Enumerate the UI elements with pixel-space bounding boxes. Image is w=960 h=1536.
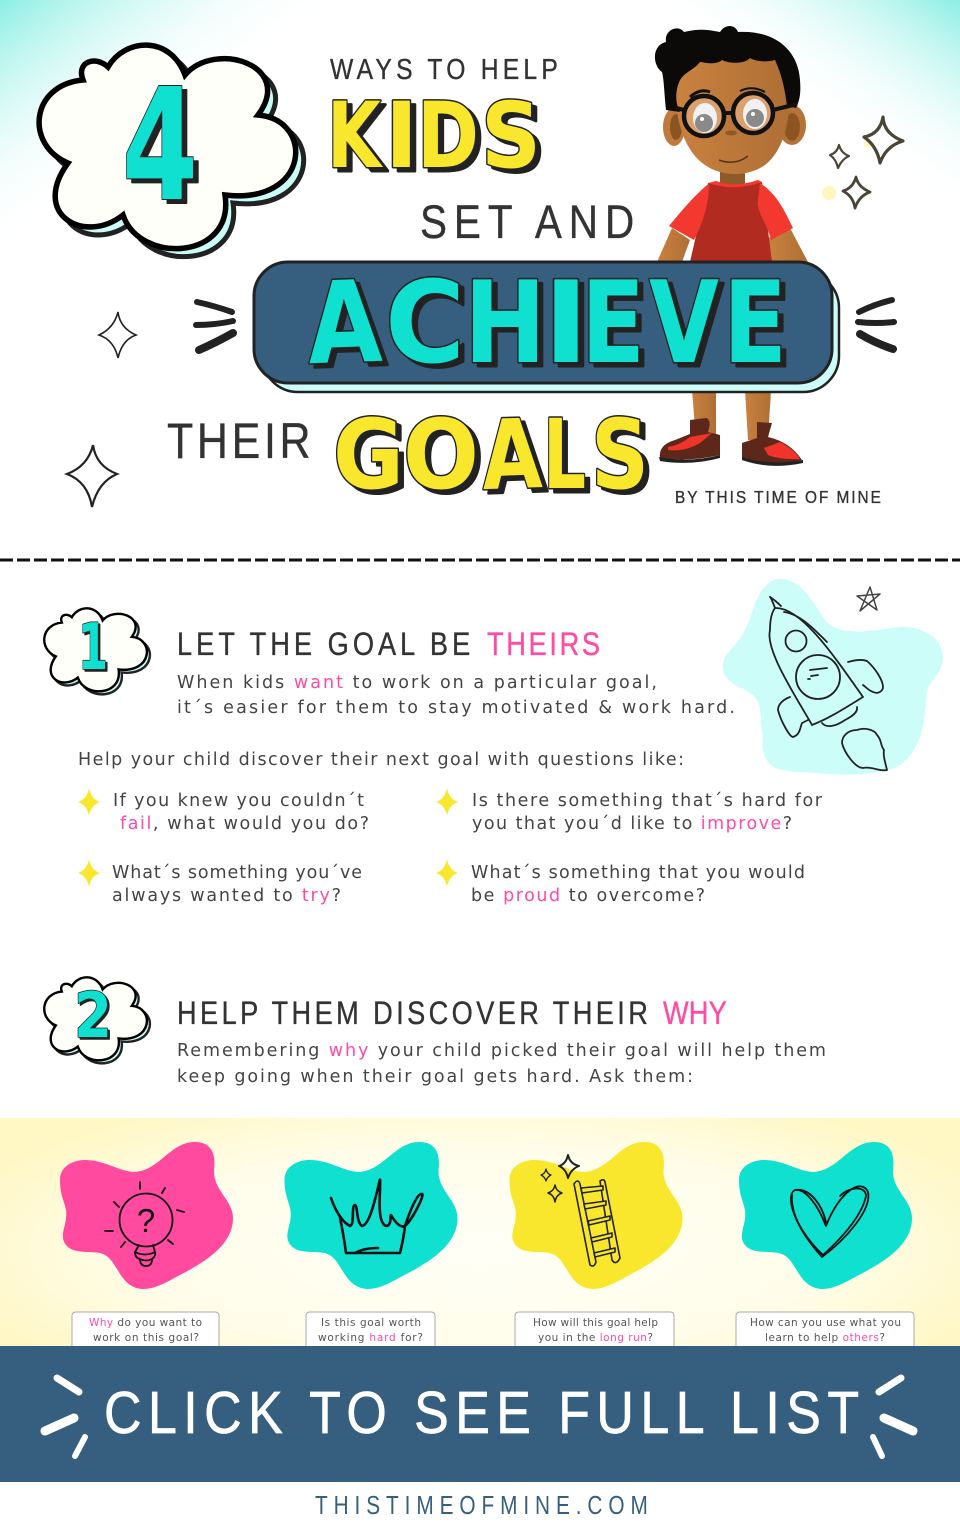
decorative sparkles near boy <box>822 117 903 208</box>
title word: GOALS: O <box>403 399 479 511</box>
title word: GOALS: S <box>591 399 649 511</box>
title line: their: THEIR <box>167 413 311 469</box>
achieve banner: C <box>385 257 465 389</box>
burst marks right of banner <box>858 300 894 349</box>
title word: GOALS: L <box>543 399 586 511</box>
card: long run (ladder) <box>510 1142 682 1289</box>
caption: others: learn to help others? <box>765 1332 885 1344</box>
card: worth it (crown) <box>284 1142 458 1289</box>
icon: cloud number 2 <box>44 977 150 1063</box>
caption: others <box>736 1312 914 1346</box>
card: others (heart) <box>739 1142 912 1289</box>
title word: KIDS <box>327 84 541 189</box>
achieve banner: E <box>581 257 645 389</box>
card: why (lightbulb): ? <box>137 1202 155 1239</box>
bullet: if you knew: If you knew you couldn´t <box>113 791 364 811</box>
prompt line: Help your child discover their next goal with questions like: <box>78 750 684 770</box>
bullet: always wanted: What´s something you´ve <box>112 863 362 883</box>
section 2 heading: HELP THEM DISCOVER THEIR <box>177 996 648 1032</box>
bullet: proud to overcome: What´s something that you would <box>471 863 805 883</box>
bullet: something hard: Is there something that´s hard for <box>472 791 823 811</box>
title word: KIDS: S <box>481 84 541 189</box>
icon: cloud with number 4 <box>39 45 304 257</box>
title word: GOALS <box>333 398 649 512</box>
section 2 intro text: keep going when their goal gets hard. Ask them: <box>177 1067 693 1087</box>
section 1 heading: THEIRS <box>487 627 600 663</box>
call to action banner <box>0 1346 960 1482</box>
achieve banner: I <box>543 257 589 389</box>
caption: long run <box>515 1312 674 1346</box>
bullet: proud to overcome <box>436 859 805 906</box>
icon: cloud number 1 <box>44 608 150 694</box>
section 1 intro text: it´s easier for them to stay motivated & work hard. <box>177 698 735 718</box>
bullet: always wanted: always wanted to try? <box>112 886 341 906</box>
dashed divider <box>0 558 960 562</box>
title line: ways to help: WAYS TO HELP <box>330 53 558 85</box>
caption: why: Why do you want to <box>89 1317 202 1329</box>
burst marks left of banner <box>196 302 233 350</box>
achieve banner: H <box>464 257 546 389</box>
section 1 heading <box>177 627 600 663</box>
title word: KIDS: I <box>385 84 418 189</box>
background: top corner gradients <box>0 0 960 560</box>
call to action banner: CLICK TO SEE FULL LIST <box>104 1380 859 1446</box>
title word: GOALS: A <box>480 398 544 512</box>
title word: GOALS: G <box>333 399 404 511</box>
section 2 intro text: Remembering why your child picked their goal will help them <box>177 1041 826 1061</box>
sparkle left lower <box>67 445 117 507</box>
achieve banner: V <box>649 257 719 389</box>
title word: KIDS: D <box>417 84 479 189</box>
achieve banner: A <box>305 256 384 390</box>
caption: why: work on this goal? <box>93 1332 199 1344</box>
title word: KIDS: K <box>327 84 384 189</box>
illustration: boy with glasses <box>655 26 808 466</box>
footer url: THISTIMEOFMINE.COM <box>315 1491 648 1520</box>
caption: worth it <box>306 1312 435 1346</box>
section 1 intro text: When kids want to work on a particular goal, <box>177 673 657 693</box>
achieve banner <box>254 256 839 392</box>
icon: cloud with number 4: 4 <box>122 55 198 236</box>
card: why (lightbulb) <box>60 1142 233 1289</box>
bullet: always wanted <box>78 859 362 906</box>
pale yellow band <box>0 1118 960 1348</box>
icon: cloud number 1: 1 <box>78 611 108 685</box>
icon: cloud number 2: 2 <box>74 979 112 1052</box>
section 1 intro text <box>177 673 735 718</box>
caption: long run: you in the long run? <box>538 1332 653 1344</box>
section 2 heading: WHY <box>663 996 727 1032</box>
caption: others: How can you use what you <box>750 1317 901 1329</box>
achieve banner: E <box>723 257 787 389</box>
caption: worth it: Is this goal worth <box>321 1317 421 1329</box>
section 1 heading: LET THE GOAL BE <box>177 627 470 663</box>
caption: long run: How will this goal help <box>533 1317 658 1329</box>
bullet: if you knew: fail, what would you do? <box>120 814 369 834</box>
title line: set and: SET AND <box>420 196 634 249</box>
caption: why <box>72 1312 219 1346</box>
illustration: rocket on teal blob <box>723 579 943 775</box>
section 2 intro text <box>177 1041 826 1087</box>
bullet: something hard: you that you´d like to improve? <box>472 814 792 834</box>
bullet: proud to overcome: be proud to overcome? <box>471 886 705 906</box>
caption: worth it: working hard for? <box>318 1332 423 1344</box>
bullet: if you knew <box>78 788 369 834</box>
bullet: something hard <box>436 788 823 834</box>
sparkle left upper <box>99 312 136 358</box>
byline: BY THIS TIME OF MINE <box>675 488 881 507</box>
